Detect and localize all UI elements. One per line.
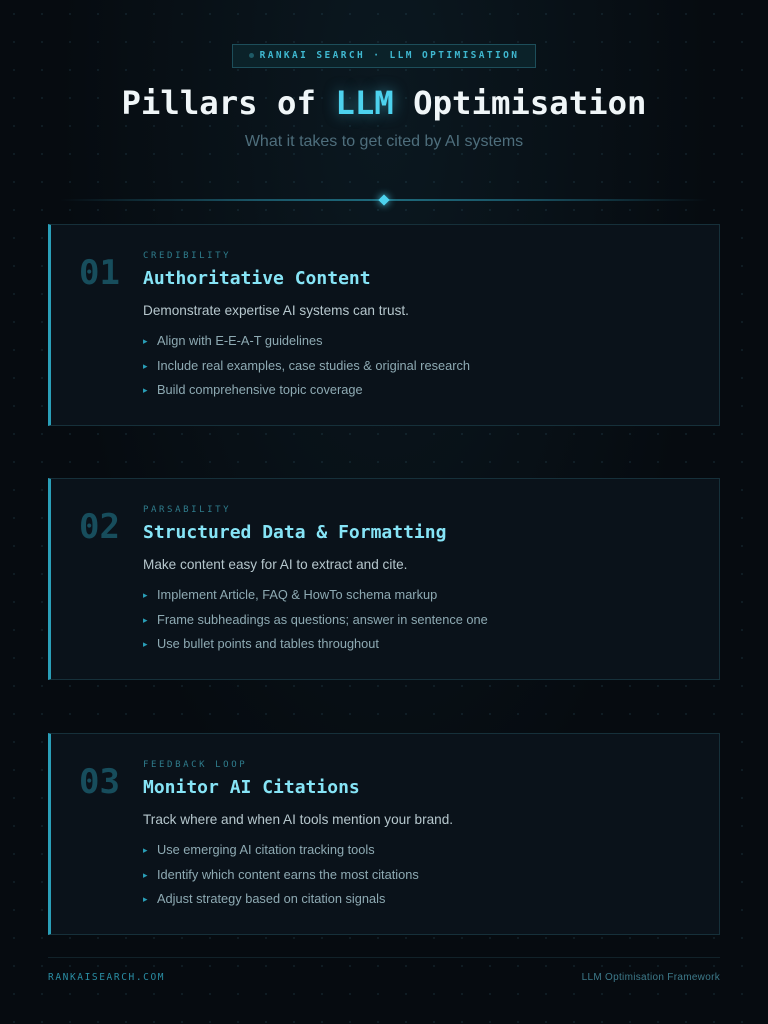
bullet list: Include real examples, case studies & original research xyxy=(157,358,470,372)
card title: Authoritative Content xyxy=(143,268,371,289)
number 02: 02 xyxy=(79,507,120,547)
footer left: RANKAISEARCH.COM xyxy=(48,972,165,983)
bullet list: ▸ xyxy=(143,360,148,370)
bullet list: Frame subheadings as questions; answer in sentence one xyxy=(157,612,488,626)
bullet list: Use bullet points and tables throughout xyxy=(157,636,379,651)
number 03: 03 xyxy=(79,762,120,802)
kicker: CREDIBILITY xyxy=(143,251,231,261)
number 01: 01 xyxy=(79,253,120,293)
bullet list: Align with E-E-A-T guidelines xyxy=(157,333,322,348)
bullet list: Build comprehensive topic coverage xyxy=(157,382,363,397)
bullet list: Identify which content earns the most citations xyxy=(157,866,419,882)
panel: 03 feedback loop xyxy=(48,733,720,935)
footer right: LLM Optimisation Framework xyxy=(582,972,720,983)
bullet list: ▸ xyxy=(143,336,148,346)
description: Demonstrate expertise AI systems can trust. xyxy=(143,303,409,318)
bullet list: ▸ xyxy=(143,845,148,855)
panel: 01 credibility xyxy=(48,224,720,426)
bullet list: ▸ xyxy=(143,870,148,880)
bullet list: ▸ xyxy=(143,590,148,600)
bullet list: Use emerging AI citation tracking tools xyxy=(157,842,375,857)
bullet list xyxy=(143,333,470,397)
bullet list xyxy=(143,587,488,651)
badge: RANKAI SEARCH · LLM OPTIMISATION xyxy=(260,50,519,61)
bullet list: Adjust strategy based on citation signals xyxy=(157,891,385,906)
description: Make content easy for AI to extract and cite. xyxy=(143,557,407,572)
kicker: FEEDBACK LOOP xyxy=(143,760,247,770)
bullet list: ▸ xyxy=(143,894,148,904)
bullet list xyxy=(143,842,419,906)
kicker: PARSABILITY xyxy=(143,505,231,515)
card title: Monitor AI Citations xyxy=(143,777,360,798)
title: Pillars of LLM Optimisation xyxy=(121,84,646,122)
bullet list: ▸ xyxy=(143,639,148,649)
card title: Structured Data & Formatting xyxy=(143,522,446,543)
badge xyxy=(232,44,536,68)
icon: diamond xyxy=(378,194,390,206)
panel: 02 parsability xyxy=(48,478,720,680)
subtitle: What it takes to get cited by AI systems xyxy=(245,133,523,150)
bullet list: ▸ xyxy=(143,614,148,624)
description: Track where and when AI tools mention your brand. xyxy=(143,812,453,827)
bullet list: ▸ xyxy=(143,385,148,395)
bullet list: Implement Article, FAQ & HowTo schema markup xyxy=(157,587,437,602)
